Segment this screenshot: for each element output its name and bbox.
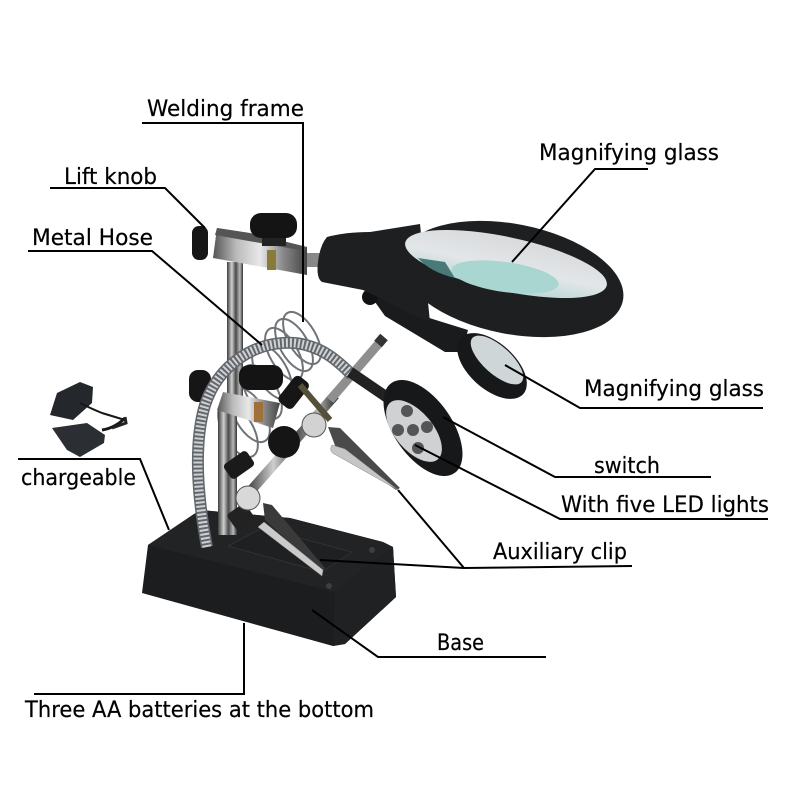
label: Magnifying glass (large): Magnifying glass xyxy=(539,141,719,166)
label: switch: switch xyxy=(594,454,660,479)
label: Auxiliary clip: Auxiliary clip xyxy=(493,540,627,565)
middle clamp and knobs xyxy=(189,365,311,428)
label: Three AA batteries at the bottom: Three AA batteries at the bottom xyxy=(24,698,374,723)
adapter icon: chargers xyxy=(50,382,126,457)
label: Welding frame: Welding frame xyxy=(147,97,304,122)
label: chargeable: chargeable xyxy=(21,466,136,491)
metal hose xyxy=(198,343,352,547)
welding frame coil xyxy=(210,306,329,463)
top clamp and lift knob xyxy=(192,213,324,275)
label: Magnifying glass (small): Magnifying glass xyxy=(584,377,764,402)
stand column xyxy=(218,262,243,535)
leader lines xyxy=(18,123,768,694)
alligator clip arms xyxy=(222,337,400,576)
label: With five LED lights: With five LED lights xyxy=(561,493,769,518)
label: Metal Hose: Metal Hose xyxy=(32,226,153,251)
label: Lift knob: Lift knob xyxy=(64,165,157,190)
label: Base: Base xyxy=(437,631,484,656)
LED lamp xyxy=(350,366,478,490)
small magnifying glass xyxy=(445,321,539,411)
base xyxy=(142,510,396,646)
large magnifying glass xyxy=(318,203,633,355)
arm linking magnifiers xyxy=(362,288,468,352)
